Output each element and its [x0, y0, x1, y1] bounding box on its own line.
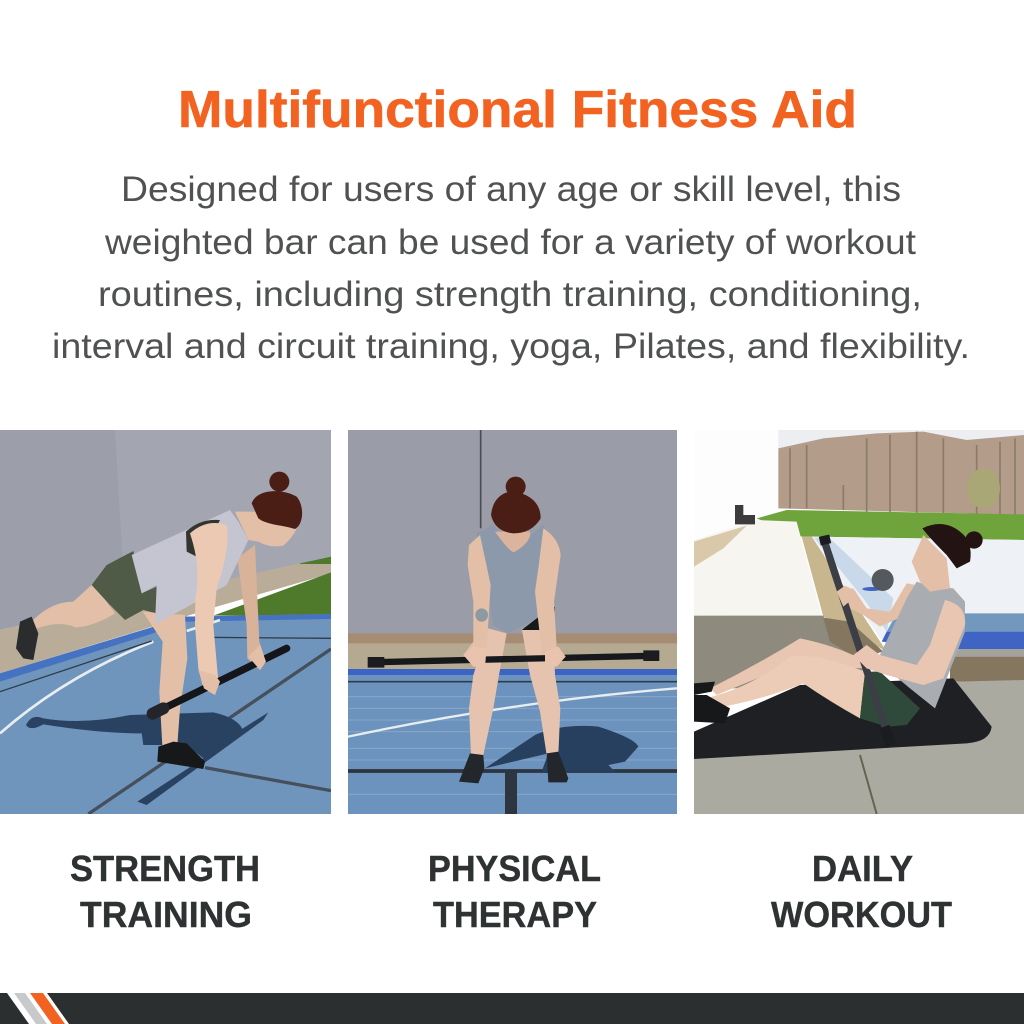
hair: [922, 524, 983, 568]
walkway: [694, 520, 822, 617]
intro paragraph: [52, 170, 970, 366]
dark concrete: [694, 616, 877, 692]
sky and white wall: [694, 430, 1024, 616]
shorts: [522, 607, 555, 630]
slab joint: [860, 755, 877, 814]
standing leg: [143, 612, 187, 752]
hair: [252, 472, 302, 529]
wall: [348, 430, 678, 635]
label: daily workout: WORKOUT: [771, 894, 952, 935]
neck and face: [235, 512, 297, 546]
label: strength training: [70, 848, 260, 935]
shoes: [694, 682, 730, 723]
slam ball: [862, 569, 894, 591]
concrete path: [0, 563, 331, 673]
panel: physical therapy photo: [348, 430, 677, 814]
court lines: [0, 620, 220, 733]
grass: [213, 557, 331, 616]
label: daily workout: DAILY: [812, 848, 913, 889]
intro paragraph: routines, including strength training, conditioning,: [98, 275, 922, 314]
weighted bar: [824, 536, 891, 745]
concrete slabs: [694, 680, 1024, 814]
label: daily workout: [771, 848, 952, 935]
left shoe: [459, 753, 484, 783]
concrete: [348, 643, 678, 669]
left arm: [463, 535, 491, 667]
hands: [463, 647, 566, 667]
grass: [757, 510, 1024, 540]
exercise mat: [694, 678, 992, 759]
shirt: [477, 524, 544, 633]
label: physical therapy: [428, 848, 601, 935]
label: physical therapy: THERAPY: [433, 894, 597, 935]
panel: strength training photo: [0, 430, 331, 814]
front shoe: [157, 742, 205, 769]
intro paragraph: Designed for users of any age or skill level, this: [121, 170, 901, 209]
near leg: [705, 656, 865, 718]
near arm: [190, 523, 228, 695]
shirt: [132, 510, 248, 624]
court: [812, 537, 1024, 657]
bench: [735, 505, 755, 524]
hands on bar: [198, 645, 266, 695]
intro paragraph: interval and circuit training, yoga, Pilates, and flexibility.: [52, 327, 970, 366]
right shoe: [547, 752, 568, 782]
gravel edge: [348, 633, 678, 644]
tattoo: [475, 608, 488, 622]
sports bra: [186, 520, 220, 558]
court blue band: [0, 614, 331, 682]
back shoe: [16, 617, 38, 660]
shirt: [878, 582, 965, 708]
pale blue court strip: [814, 538, 893, 632]
hair: [491, 477, 541, 533]
label: physical therapy: PHYSICAL: [428, 848, 601, 889]
tan patch: [694, 526, 747, 567]
far leg: [710, 638, 863, 695]
label: strength training: STRENGTH: [70, 848, 260, 889]
footer bar: [0, 993, 1024, 1024]
legs: [469, 628, 560, 755]
shadow: [485, 726, 638, 772]
shadow: [26, 712, 268, 805]
weighted bar: [152, 648, 287, 714]
court: [0, 614, 331, 814]
woman: back leg: [30, 583, 115, 629]
intro paragraph: weighted bar can be used for a variety of workout: [104, 223, 916, 262]
face and neck: [912, 535, 950, 592]
panel: daily workout photo: [694, 430, 1024, 814]
upper hand: [837, 586, 854, 607]
gravel: [823, 618, 1024, 682]
wall: [0, 430, 331, 630]
weighted bar: [368, 656, 659, 662]
wall seam: [478, 430, 483, 528]
faint court texture lines: [348, 697, 677, 794]
title: Multifunctional Fitness Aid: [178, 81, 857, 139]
shorts: [92, 551, 157, 620]
face: [495, 532, 530, 552]
far arm: [237, 545, 266, 670]
far arm: [837, 583, 917, 627]
label: strength training: TRAINING: [80, 894, 252, 935]
tree line: [778, 432, 1024, 515]
court blue bands: [887, 613, 1024, 632]
near arm: [853, 600, 965, 685]
shorts: [860, 672, 920, 727]
right arm: [535, 528, 566, 667]
court: [348, 674, 678, 814]
court blue band: [348, 669, 678, 675]
court lines: [348, 679, 677, 684]
pale gravel: [802, 537, 887, 652]
